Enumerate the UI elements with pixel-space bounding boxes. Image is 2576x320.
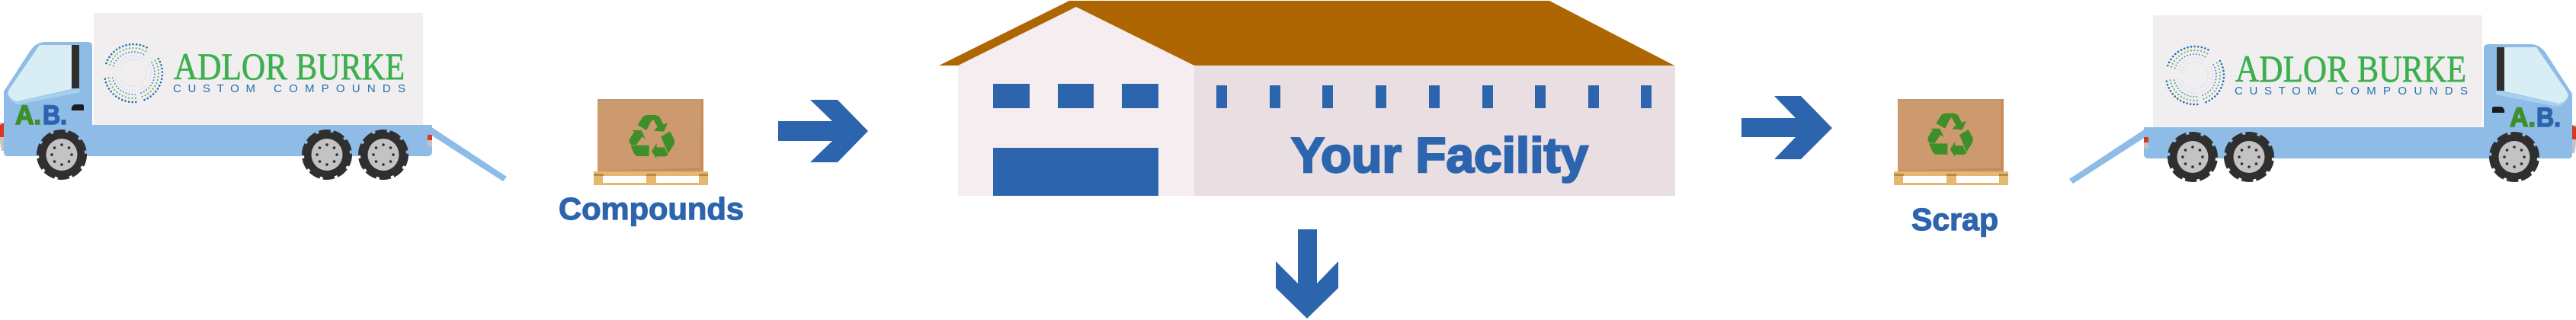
logo tagline — [173, 82, 405, 95]
arrow: facility to scrap — [1741, 96, 1832, 159]
logo tagline: CUSTOM — [173, 82, 255, 95]
pallet box: scrap — [1894, 99, 2008, 185]
front windows — [993, 84, 1158, 108]
logo: Adlor Burke — [2167, 46, 2468, 104]
cab initials — [2510, 103, 2561, 133]
icon: recycling symbol — [1927, 114, 1973, 157]
roof — [939, 1, 1674, 66]
label: Your Facility: Your Facility — [1291, 127, 1588, 183]
truck body with ramp and wheels — [0, 13, 507, 181]
label: Scrap: Scrap — [1911, 202, 1998, 237]
label: Compounds: Compounds — [559, 191, 744, 226]
cardboard box on pallet — [594, 99, 708, 185]
side wing wall — [1194, 66, 1675, 196]
building: your facility — [939, 1, 1675, 196]
logo tagline: CUSTOM — [2235, 85, 2317, 98]
cab initials: A. — [2510, 103, 2536, 133]
cardboard box on pallet — [1894, 99, 2008, 185]
logo tagline: COMPOUNDS — [274, 82, 405, 95]
logo wordmark: ADLOR — [174, 45, 288, 88]
logo swirl icon — [2167, 46, 2224, 104]
garage door — [993, 148, 1158, 196]
arrow: down from facility — [1276, 229, 1338, 318]
front gable wall — [958, 7, 1194, 196]
icon: recycling symbol — [630, 115, 674, 158]
pallet box: compounds — [594, 99, 708, 185]
truck body with ramp and wheels — [2069, 15, 2576, 184]
cab initials: A. — [15, 101, 41, 130]
truck: left delivery truck — [0, 13, 507, 181]
logo wordmark: BURKE — [2357, 47, 2466, 90]
cab initials — [15, 101, 67, 130]
logo tagline: COMPOUNDS — [2335, 85, 2468, 98]
logo: Adlor Burke — [105, 44, 405, 102]
cab initials: B. — [2536, 103, 2561, 133]
logo wordmark: ADLOR — [2235, 47, 2350, 90]
arrow: compounds to facility — [778, 100, 868, 162]
logo swirl icon — [105, 44, 162, 102]
cab initials: B. — [43, 101, 67, 130]
truck: right pickup truck — [2069, 15, 2576, 184]
logo wordmark — [174, 45, 405, 88]
logo wordmark: BURKE — [296, 45, 405, 88]
logo wordmark — [2235, 47, 2466, 90]
side slit windows — [1216, 85, 1652, 108]
logo tagline — [2235, 85, 2468, 98]
